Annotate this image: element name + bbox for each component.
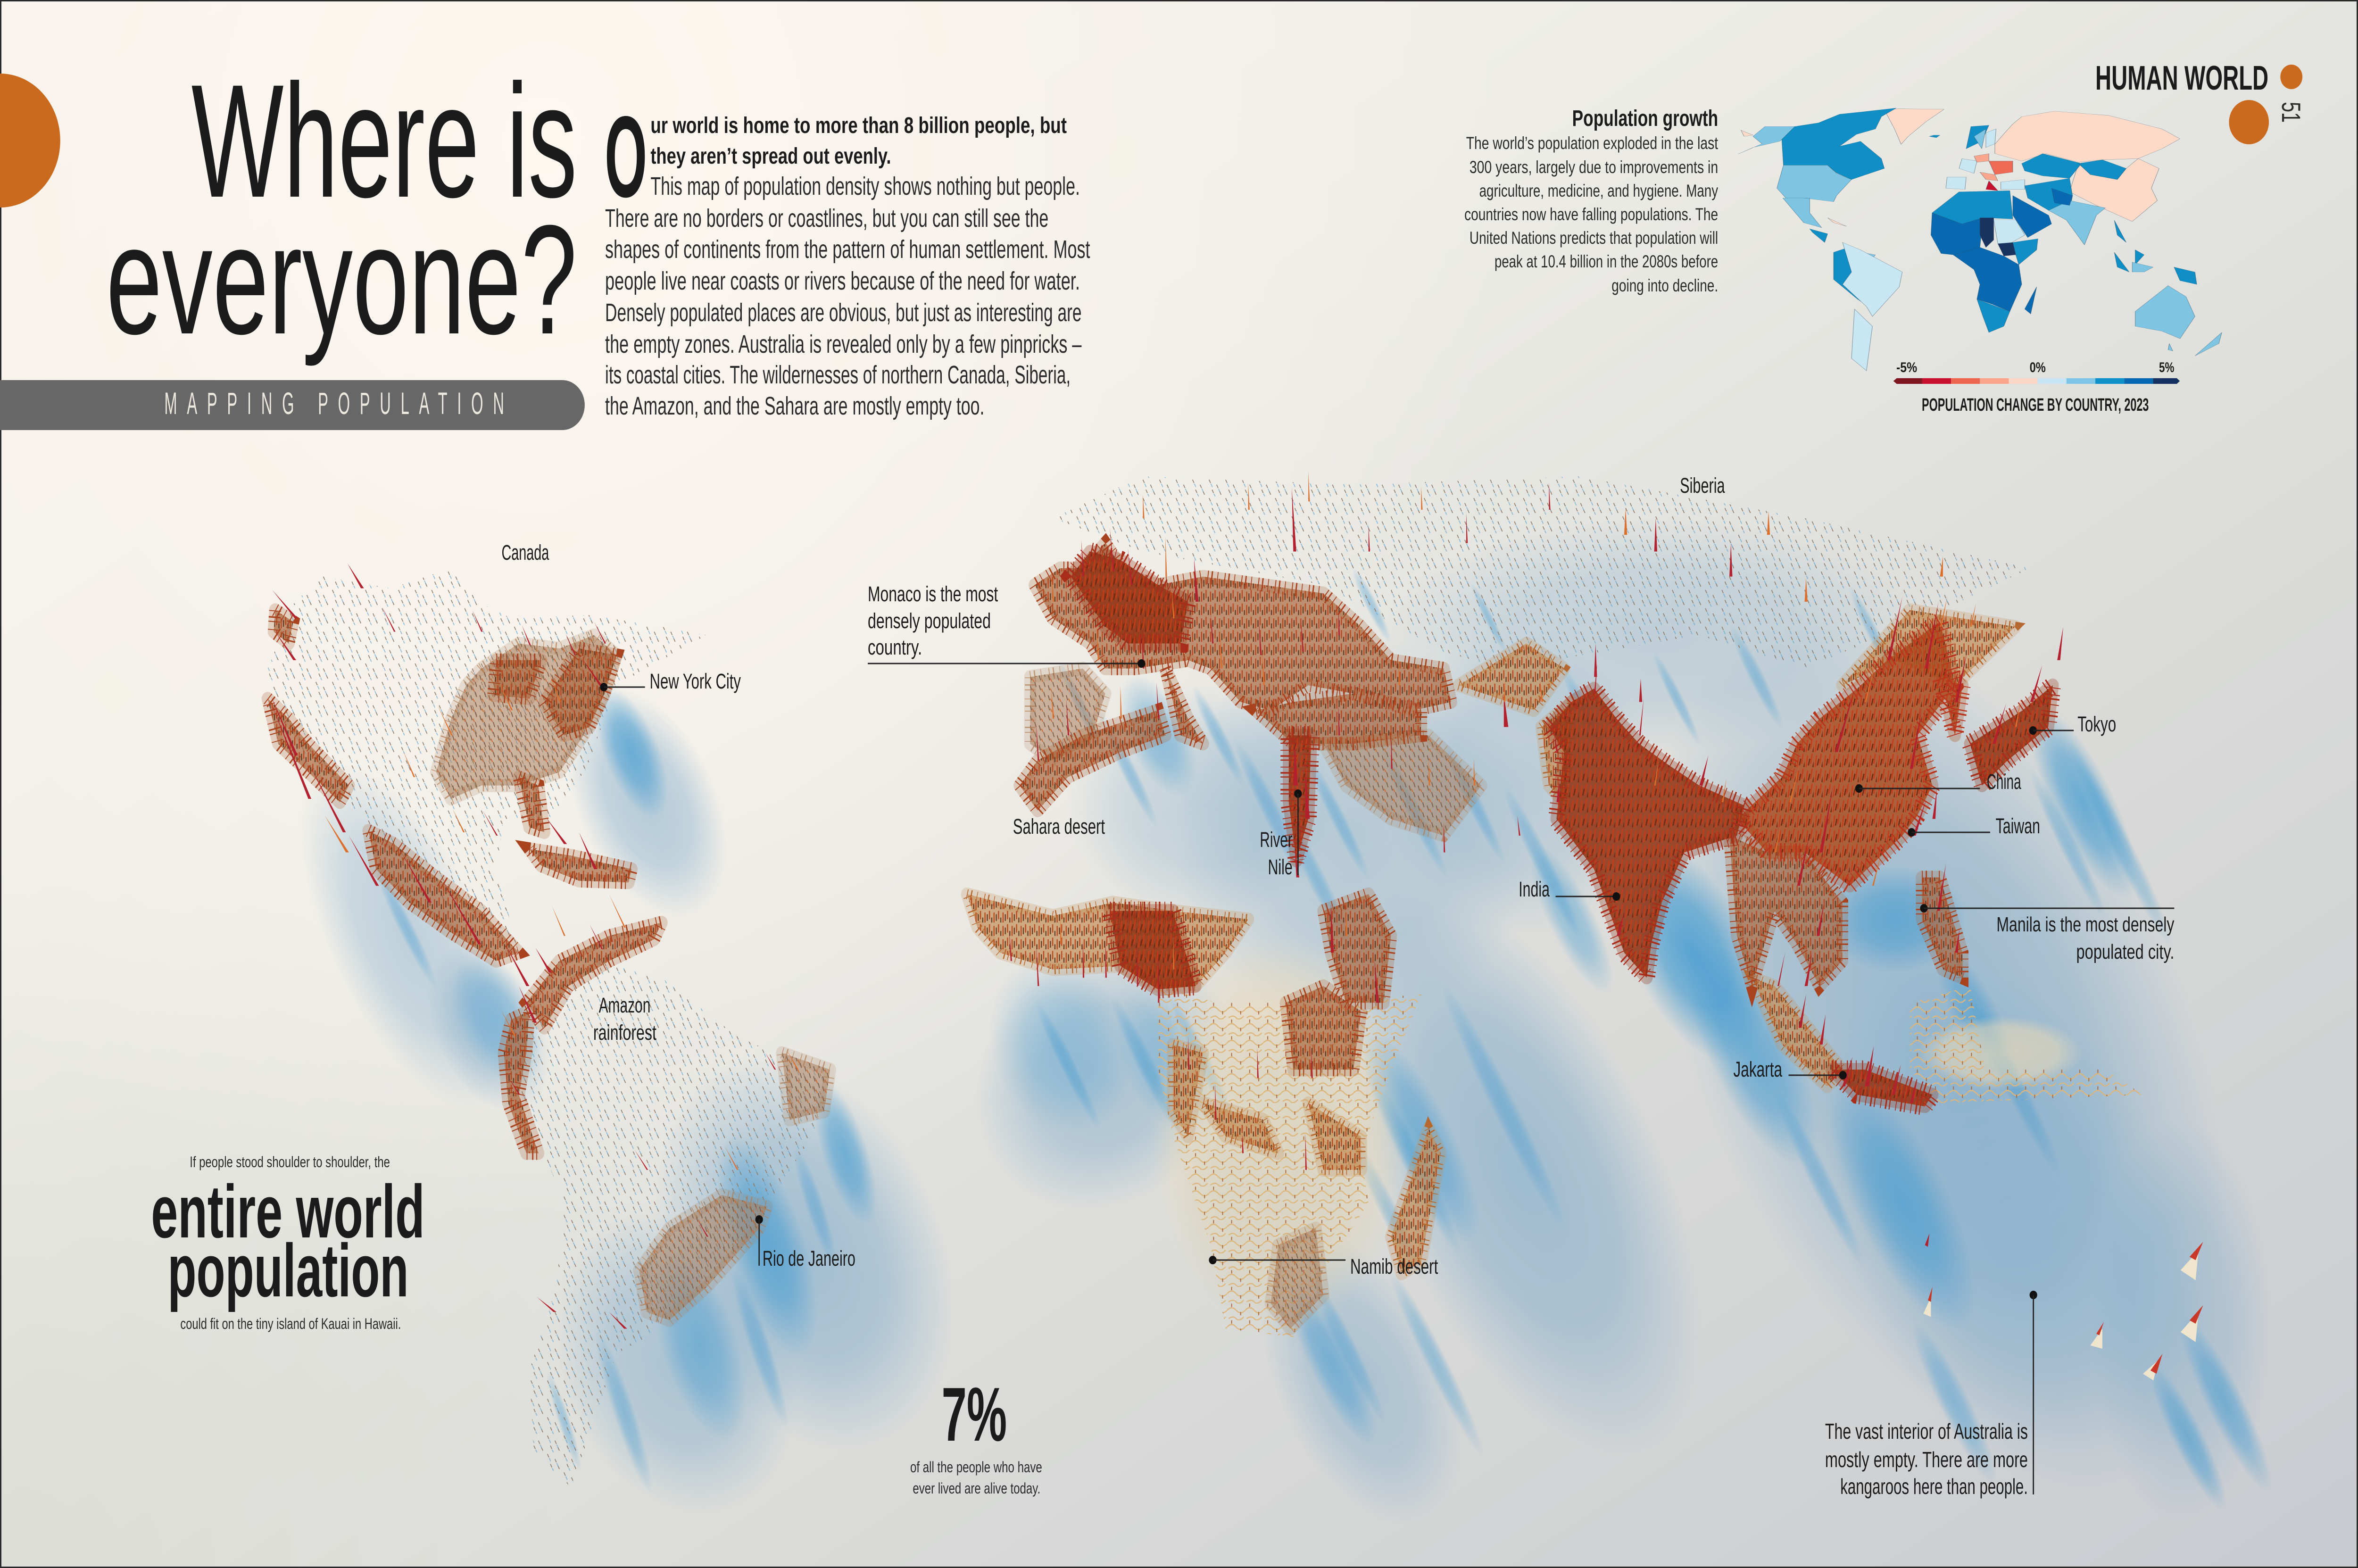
- intro text with drop cap: its coastal cities. The wildernesses of northern Canada, Siberia,: [605, 361, 1071, 389]
- legend colour scale: 0%: [2030, 360, 2046, 375]
- label: Jakarta: Jakarta: [1734, 1058, 1782, 1082]
- label: Taiwan: Taiwan: [1996, 814, 2040, 838]
- strong blue coastal shadows: [433, 661, 2285, 1518]
- legend colour scale: POPULATION CHANGE BY COUNTRY, 2023: [1922, 394, 2149, 415]
- label: New York City: New York City: [650, 670, 741, 694]
- Africa, Indonesia and Pacific ridged terrain: [1150, 936, 2143, 1337]
- label: Sahara desert: Sahara desert: [1013, 815, 1105, 839]
- intro text with drop cap: they aren’t spread out evenly.: [650, 143, 891, 169]
- intro text with drop cap: people live near coasts or rivers because of the need for water.: [605, 267, 1080, 295]
- callout: 7 percent statistic: [910, 1372, 1042, 1497]
- orange population spikes: [325, 471, 2021, 1170]
- callout: Monaco: country.: [868, 636, 922, 660]
- label: Rio de Janeiro: [756, 1215, 855, 1271]
- red population spikes: [271, 483, 2063, 1328]
- population growth text: United Nations predicts that population will: [1470, 228, 1718, 248]
- label: Canada: Canada: [502, 541, 549, 565]
- title: everyone?: [106, 192, 577, 367]
- page number marker: [2229, 100, 2305, 144]
- Greenland, Russia and China (slight decline): [1741, 109, 2180, 226]
- intro text with drop cap: ur world is home to more than 8 billion people, but: [650, 113, 1067, 138]
- label: Jakarta: [1734, 1058, 1847, 1082]
- population growth text: agriculture, medicine, and hygiene. Many: [1479, 181, 1718, 200]
- label: India: [1519, 878, 1620, 902]
- label: Namib desert: Namib desert: [1350, 1255, 1438, 1279]
- callout: Australia interior: kangaroos here than people.: [1840, 1475, 2028, 1499]
- label: China: [1855, 770, 2021, 794]
- intro text with drop cap: shapes of continents from the pattern of human settlement. Most: [605, 235, 1090, 264]
- legend colour scale: [1893, 360, 2180, 415]
- label: Siberia: Siberia: [1680, 474, 1725, 498]
- callout: Monaco: [868, 582, 1145, 668]
- decorative orange half circle, left edge: [0, 74, 60, 207]
- callout: Australia interior: The vast interior of Australia is: [1825, 1419, 2028, 1444]
- label: China: China: [1987, 770, 2021, 794]
- subtitle banner: MAPPING POPULATION: [164, 387, 504, 421]
- callout: Australia interior: mostly empty. There are more: [1825, 1448, 2028, 1472]
- label: Amazon rainforest: Amazon: [599, 994, 650, 1018]
- intro text with drop cap: [605, 92, 1090, 420]
- callout: 7 percent statistic: ever lived are alive today.: [913, 1480, 1040, 1497]
- legend colour scale: -5%: [1896, 360, 1917, 375]
- label: India: India: [1519, 878, 1550, 902]
- callout: world population on Kauai: population: [167, 1229, 408, 1313]
- label: New York City: [600, 670, 741, 694]
- pale blue countries: [1843, 129, 2025, 371]
- intro text with drop cap: the empty zones. Australia is revealed only by a few pinpricks –: [605, 330, 1082, 358]
- callout: Monaco: Monaco is the most: [868, 582, 998, 606]
- label: Rio de Janeiro: Rio de Janeiro: [763, 1247, 855, 1271]
- label: River Nile: Nile: [1268, 855, 1293, 879]
- legend colour scale: 5%: [2159, 360, 2174, 375]
- sub-Saharan Africa and Arabia (dark blue): [1931, 188, 2073, 314]
- intro text with drop cap: O: [605, 92, 647, 222]
- broad cast shadows: [257, 512, 2347, 1566]
- choropleth world map: population change by country: [1738, 108, 2222, 371]
- intro text with drop cap: Densely populated places are obvious, but just as interesting are: [605, 299, 1082, 327]
- title: Where is: [191, 51, 577, 231]
- Ukraine, Balkans, declining countries: [1989, 161, 2013, 174]
- USA, Alaska, Australia, India and light blue countries: [1738, 126, 2222, 356]
- high density: India, Java, Japan, Nile, NW Europe, Nigeria: [1071, 552, 2053, 1106]
- page number marker: 51: [2276, 102, 2305, 123]
- population growth text: going into decline.: [1611, 276, 1718, 295]
- 3D population density world map: [257, 471, 2347, 1566]
- label: Tokyo: [2029, 713, 2116, 737]
- Canada and mid blue countries: [1781, 108, 2197, 332]
- population growth text: peak at 10.4 billion in the 2080s before: [1495, 252, 1718, 271]
- population growth text: Population growth: [1572, 106, 1718, 131]
- population growth text: [1464, 106, 1718, 295]
- label: Tokyo: Tokyo: [2077, 713, 2116, 737]
- callout: world population on Kauai: entire world: [151, 1170, 425, 1254]
- lightly populated areas: USA, Brazil, Iberia, Iran, South Africa: [436, 635, 1481, 1328]
- callout: Monaco: densely populated: [868, 609, 991, 633]
- label: River Nile: River: [1260, 828, 1293, 852]
- sparsely settled land specks: [268, 476, 2030, 1487]
- callout: Manila: Manila is the most densely: [1996, 913, 2174, 936]
- label: Taiwan: [1908, 814, 2040, 838]
- callout: Manila: populated city.: [2076, 940, 2174, 963]
- intro text with drop cap: There are no borders or coastlines, but you can still see the: [605, 204, 1048, 232]
- medium density settled land: [268, 543, 2015, 1274]
- label: Amazon rainforest: rainforest: [593, 1021, 656, 1045]
- Australian cities: [1923, 1242, 2203, 1380]
- title: [106, 51, 577, 367]
- population growth text: 300 years, largely due to improvements in: [1470, 158, 1718, 177]
- callout: world population on Kauai: If people stood shoulder to shoulder, the: [190, 1154, 390, 1170]
- Greece (steep decline): [1986, 181, 1998, 191]
- pale red eastern Europe: [1974, 154, 1998, 181]
- soft shadow streaks: [369, 564, 2182, 1498]
- subtitle banner: [0, 380, 585, 430]
- intro text with drop cap: This map of population density shows nothing but people.: [650, 172, 1080, 200]
- callout: 7 percent statistic: of all the people who have: [910, 1459, 1042, 1476]
- population growth text: countries now have falling populations. The: [1464, 205, 1718, 224]
- callout: world population on Kauai: could fit on the tiny island of Kauai in Hawaii.: [180, 1316, 401, 1332]
- population growth text: The world’s population exploded in the last: [1466, 133, 1718, 153]
- intro text with drop cap: the Amazon, and the Sahara are mostly empty too.: [605, 392, 984, 420]
- callout: Manila: [1920, 904, 2174, 963]
- high density: China: [1737, 622, 1962, 886]
- section header: Human World: HUMAN WORLD: [2095, 59, 2268, 97]
- label: Namib desert: [1209, 1255, 1438, 1279]
- callout: world population on Kauai: [151, 1154, 425, 1332]
- callout: Australia interior: [1825, 1291, 2037, 1499]
- fastest-growing countries (navy): [1980, 218, 2016, 256]
- label: River Nile: [1260, 789, 1302, 879]
- callout: 7 percent statistic: 7%: [942, 1372, 1007, 1457]
- label: Amazon rainforest: [593, 994, 656, 1045]
